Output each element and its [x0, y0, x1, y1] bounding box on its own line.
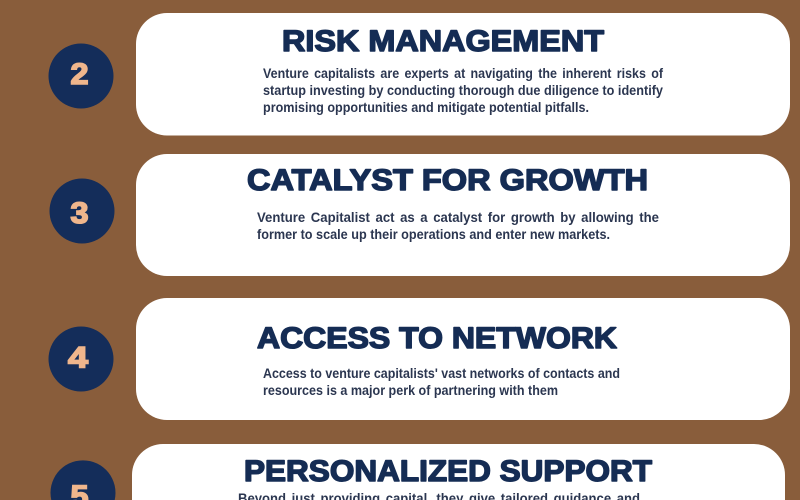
- number badge 3: [50, 178, 114, 244]
- step 3: catalyst for growth: [50, 154, 790, 276]
- number badge 2: [48, 44, 114, 108]
- step 2: risk management: [48, 13, 790, 136]
- number badge 4: 4: [68, 342, 88, 374]
- panel: catalyst for growth: [136, 154, 790, 276]
- text: catalyst description: former to scale up their operations and enter new markets.: [257, 227, 610, 242]
- heading: risk management: RISK MANAGEMENT: [282, 25, 604, 58]
- step 5: personalized support: [50, 444, 785, 500]
- text: access description: Access to venture capitalists' vast networks of contacts and: [263, 366, 620, 381]
- heading: catalyst for growth: CATALYST FOR GROWTH: [247, 164, 648, 197]
- text: catalyst description: [257, 210, 659, 242]
- number badge 5: [50, 460, 116, 500]
- panel: risk management: [136, 13, 790, 136]
- heading: personalized support: PERSONALIZED SUPPORT: [244, 455, 652, 488]
- text: risk management description: startup investing by conducting thorough due diligence to identify: [263, 83, 663, 98]
- text: access description: [263, 366, 620, 398]
- number badge 4: [48, 326, 114, 392]
- text: catalyst description: Venture Capitalist act as a catalyst for growth by allowing the: [257, 210, 659, 225]
- text: risk management description: Venture capitalists are experts at navigating the inherent risks of: [263, 66, 663, 81]
- text: access description: resources is a major perk of partnering with them: [263, 383, 558, 398]
- heading: access to network: ACCESS TO NETWORK: [257, 322, 617, 355]
- panel: access to network: [136, 298, 790, 420]
- text: risk management description: promising opportunities and mitigate potential pitfalls.: [263, 100, 589, 115]
- number badge 3: 3: [70, 197, 88, 230]
- text: risk management description: [263, 66, 663, 115]
- number badge 2: 2: [70, 58, 88, 91]
- step 4: access to network: [48, 298, 790, 420]
- panel: personalized support: [132, 444, 785, 500]
